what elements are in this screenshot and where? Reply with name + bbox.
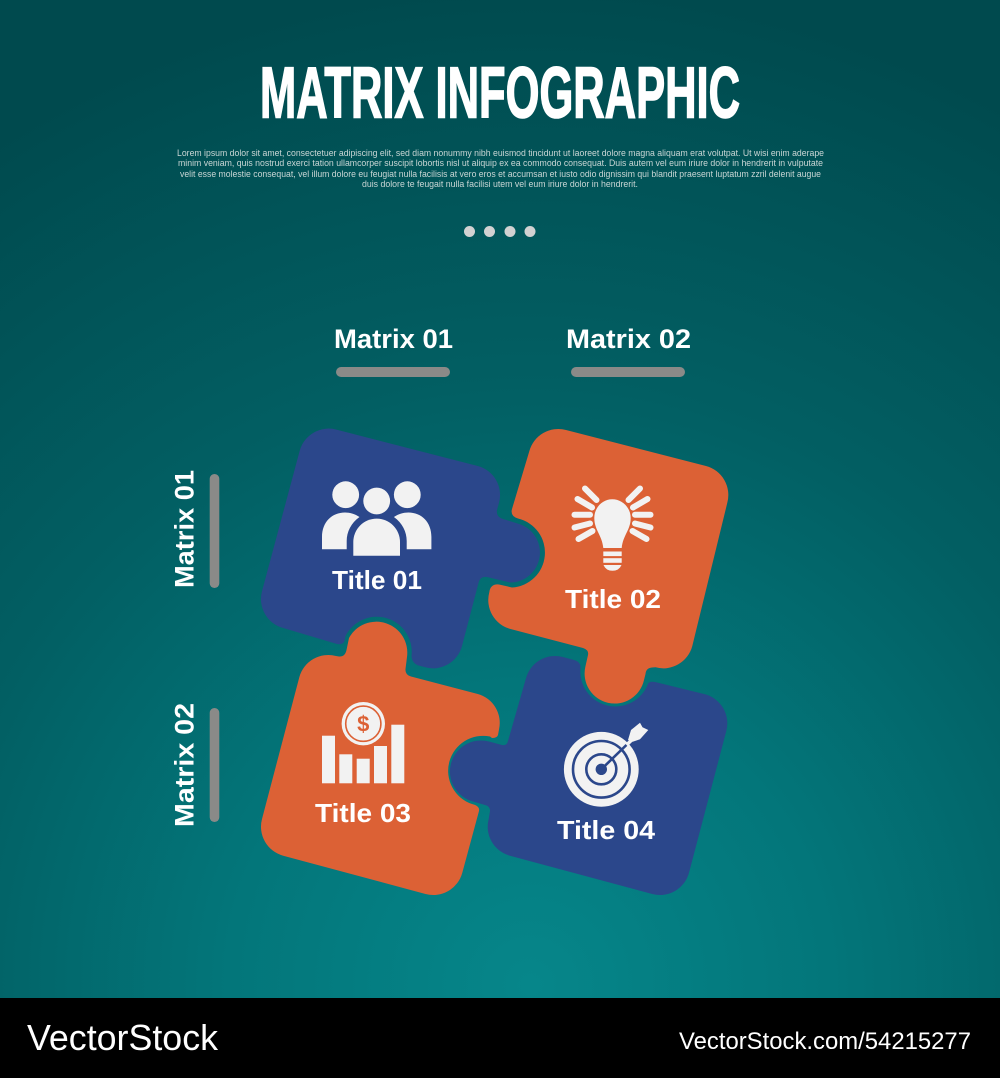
row header: Matrix 02 [170, 703, 219, 827]
intro paragraph: velit esse molestie consequat, vel illum dolore eu feugiat nulla facilisis at vero eros et accumsan et iusto odio dignissim qui blandit praesent luptatum zzril delenit augue [180, 169, 821, 179]
column header: Matrix 02 [566, 324, 691, 377]
intro paragraph: Lorem ipsum dolor sit amet, consectetuer adipiscing elit, sed diam nonummy nibh euismod tincidunt ut laoreet dolore magna aliquam erat volutpat. Ut wisi enim aderape [177, 148, 824, 158]
footer image id: VectorStock.com/54215277 [679, 1028, 971, 1055]
footer logo: VectorStock [27, 1017, 219, 1058]
column header: Matrix 01 [334, 324, 453, 377]
column header: Matrix 02: Matrix 02 [566, 324, 691, 354]
intro paragraph [177, 148, 824, 189]
panel: puzzle piece 04 [450, 656, 727, 895]
footer bar [0, 998, 1000, 1078]
icon: bar chart with coin: $ [357, 712, 369, 736]
label: Title 01: Title 01 [332, 565, 422, 595]
panel: puzzle piece 02 [488, 429, 728, 704]
icon: target with arrow [564, 723, 648, 807]
label: Title 03: Title 03 [315, 798, 411, 828]
intro paragraph: minim veniam, quis nostrud exerci tation ullamcorper suscipit lobortis nisl ut aliquip ex ea commodo consequat. Duis autem vel eum iriure dolor in hendrerit in vulputate [178, 158, 823, 168]
icon: light bulb [574, 488, 650, 571]
pagination dots [464, 226, 536, 237]
panel: puzzle piece 03 [261, 622, 500, 895]
row header: Matrix 01 [170, 470, 219, 588]
row header: Matrix 01: Matrix 01 [170, 470, 200, 588]
row header: Matrix 02: Matrix 02 [170, 703, 200, 827]
column header: Matrix 01: Matrix 01 [334, 324, 453, 354]
icon: bar chart with coin [322, 702, 404, 783]
label: Title 04: Title 04 [557, 815, 656, 845]
icon: people [322, 481, 431, 556]
label: Title 02: Title 02 [565, 584, 661, 614]
panel: puzzle piece 01 [261, 429, 540, 668]
intro paragraph: duis dolore te feugait nulla facilisi utem vel eum iriure dolor in hendrerit. [362, 179, 638, 189]
